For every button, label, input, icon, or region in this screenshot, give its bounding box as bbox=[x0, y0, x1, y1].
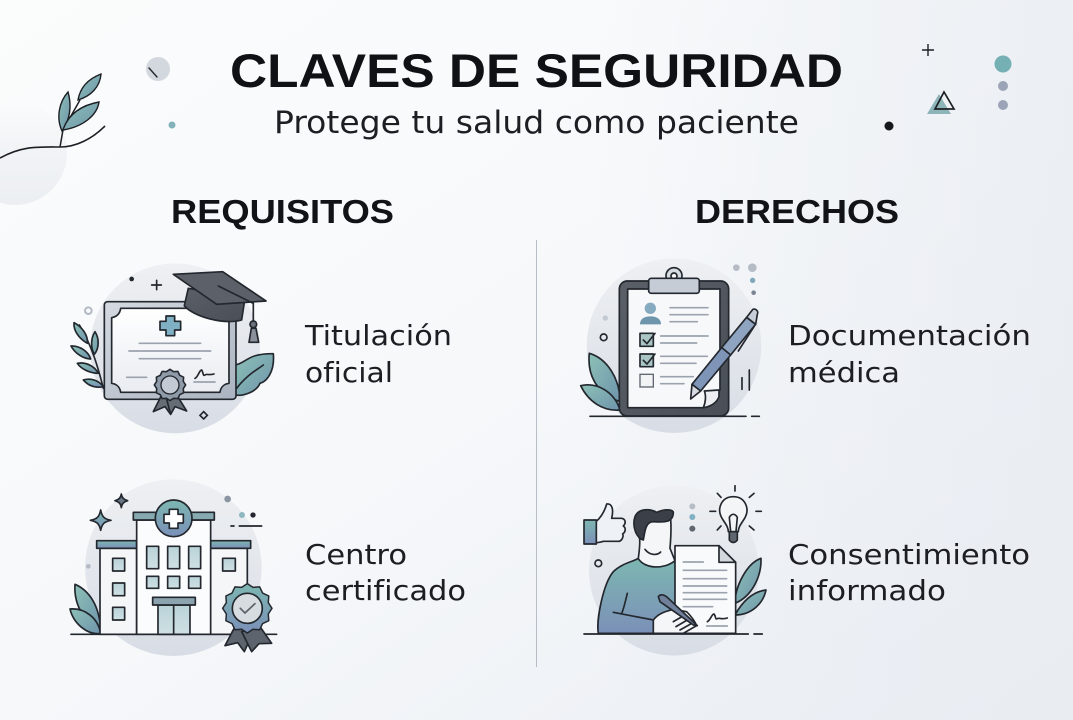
thumb up bbox=[584, 504, 625, 544]
heading: derechos: DERECHOS bbox=[695, 193, 899, 230]
subtitle: Protege tu salud como paciente bbox=[274, 105, 799, 141]
label: consentimiento informado: informado bbox=[788, 574, 946, 607]
leaves bbox=[735, 558, 761, 603]
graduation cap bbox=[173, 272, 266, 342]
seal bbox=[153, 369, 187, 414]
label: titulación oficial: Titulación bbox=[304, 319, 452, 352]
icon: clipboard and pen bbox=[581, 258, 761, 433]
label: titulación oficial: oficial bbox=[305, 356, 393, 389]
rosette bbox=[223, 584, 272, 652]
icon: diploma and graduation cap bbox=[71, 263, 274, 433]
pen bbox=[691, 309, 758, 399]
label: consentimiento informado bbox=[788, 538, 1030, 607]
title: CLAVES DE SEGURIDAD bbox=[230, 44, 843, 97]
icon: hospital with certification rosette bbox=[70, 479, 277, 656]
label: centro certificado: Centro bbox=[305, 538, 407, 571]
check boxes bbox=[640, 333, 653, 346]
decoration: grey pill top left bbox=[146, 57, 170, 81]
light bulb bbox=[710, 486, 761, 542]
label: documentación médica: médica bbox=[788, 356, 900, 389]
label: consentimiento informado: Consentimiento bbox=[788, 538, 1030, 571]
right leaf bbox=[235, 354, 274, 395]
label: titulación oficial bbox=[304, 319, 452, 389]
clip bbox=[649, 268, 699, 293]
windows bbox=[113, 546, 235, 620]
person bbox=[645, 303, 656, 314]
document bbox=[675, 546, 736, 633]
decoration: teal dot bbox=[168, 122, 176, 128]
sparkles bbox=[90, 510, 111, 530]
left branch bbox=[71, 323, 103, 388]
label: centro certificado bbox=[305, 538, 466, 607]
heading: requisitos: REQUISITOS bbox=[171, 193, 394, 230]
label: documentación médica bbox=[788, 319, 1031, 389]
icon: patient signing consent form bbox=[584, 486, 766, 656]
building bbox=[100, 548, 137, 634]
leaves bbox=[75, 584, 101, 632]
diploma frame bbox=[104, 302, 236, 399]
decoration: leaf sprig top left bbox=[0, 74, 105, 205]
door bbox=[158, 605, 190, 634]
person bbox=[598, 510, 677, 633]
label: documentación médica: Documentación bbox=[788, 319, 1031, 352]
label: centro certificado: certificado bbox=[305, 574, 466, 607]
hand and pen bbox=[653, 595, 697, 633]
leaves bbox=[589, 353, 620, 402]
decoration: shapes top right bbox=[884, 44, 1012, 130]
board bbox=[619, 281, 729, 416]
